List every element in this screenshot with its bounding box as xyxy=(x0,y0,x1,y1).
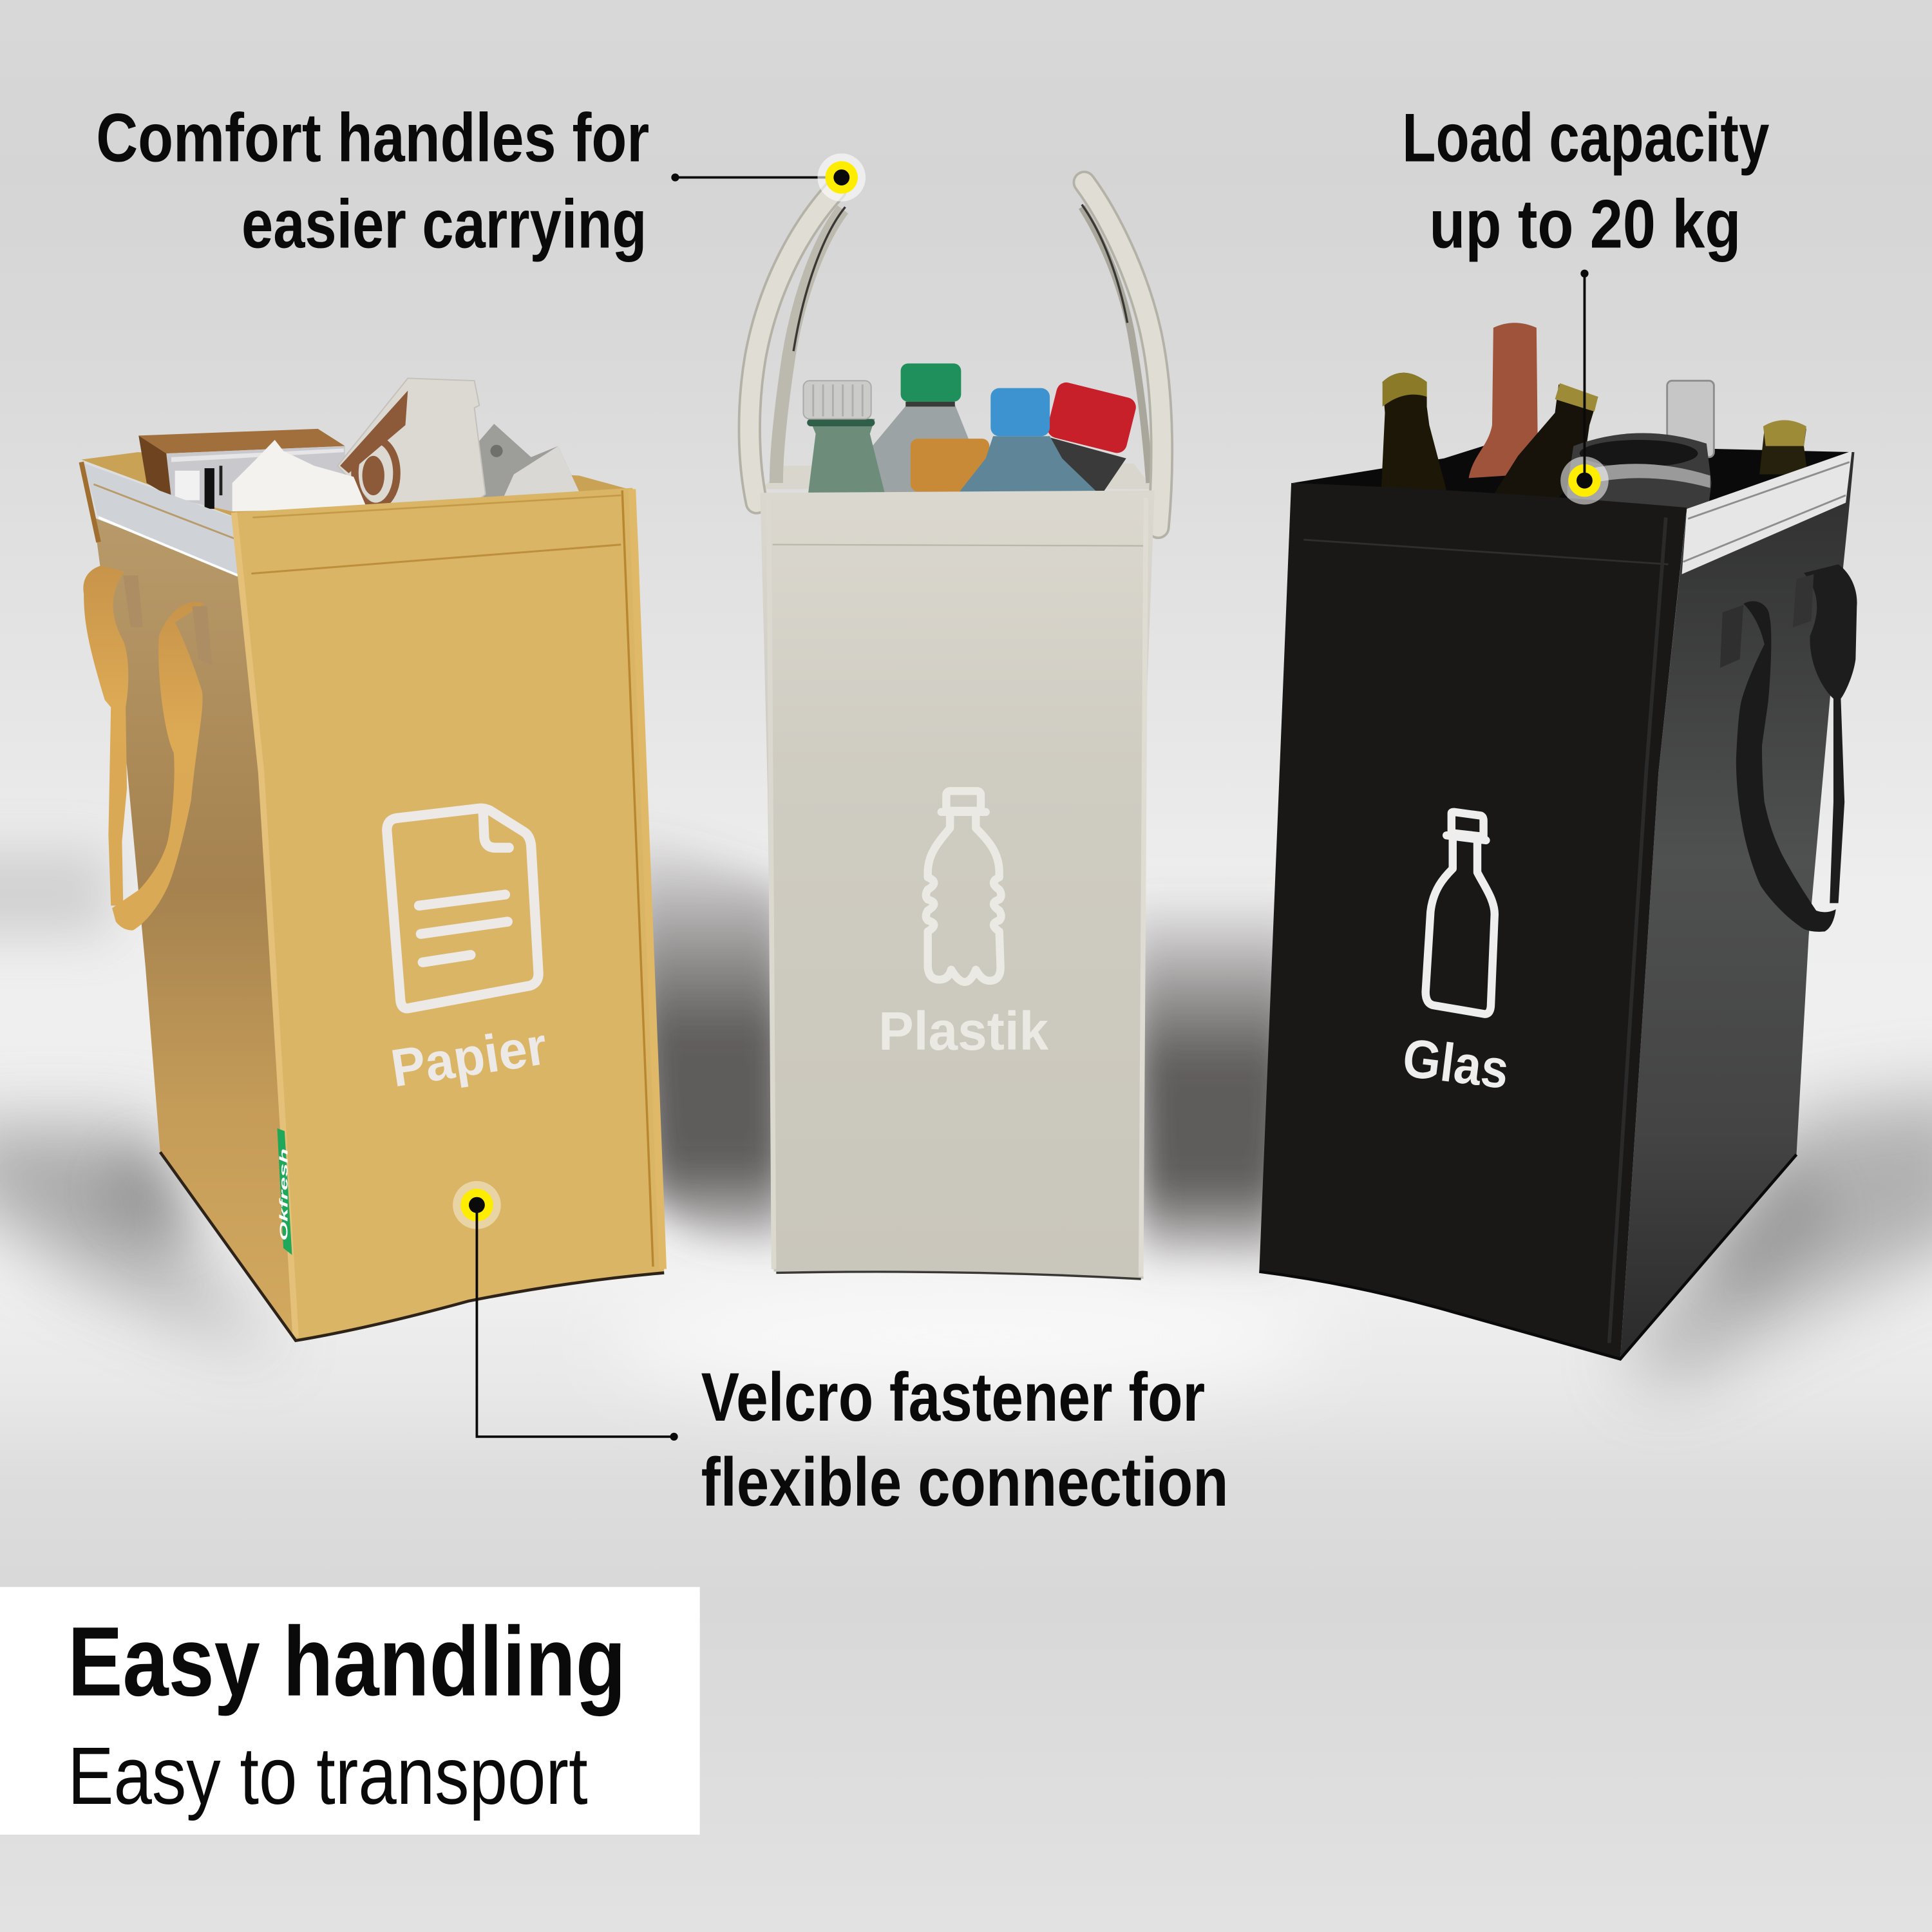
yellow paper bag xyxy=(81,378,664,1341)
blue bottle body xyxy=(959,436,1098,493)
white cap xyxy=(803,381,871,419)
plastic bottles xyxy=(803,363,1138,493)
subheading: Easy to transport xyxy=(68,1730,588,1821)
callout: load capacity xyxy=(1402,99,1769,504)
side front strap xyxy=(1720,601,1836,932)
jar xyxy=(1567,433,1712,513)
callout text: easier carrying xyxy=(242,185,647,263)
side panel xyxy=(93,518,296,1341)
paper contents: crumpled paper xyxy=(232,440,367,511)
blue cap xyxy=(990,388,1050,436)
label: Papier: Papier xyxy=(387,1017,551,1098)
callout text: Comfort handles for xyxy=(96,99,649,176)
green cap xyxy=(901,363,961,406)
leader line xyxy=(671,173,842,182)
icon: plastic bottle xyxy=(926,791,1001,982)
tilted dark bottle xyxy=(1488,384,1598,505)
marker dot xyxy=(453,1181,501,1229)
black glass bag xyxy=(1259,323,1857,1359)
plastic bag xyxy=(750,182,1162,1279)
front panel xyxy=(1259,483,1687,1359)
red bottle xyxy=(1469,323,1538,478)
heading: Easy handling xyxy=(68,1607,626,1717)
callout text: Load capacity xyxy=(1402,99,1769,176)
reflective band xyxy=(81,462,238,575)
clear bottle body xyxy=(873,402,969,493)
green glass bottle xyxy=(807,419,885,493)
red cap xyxy=(1045,381,1138,455)
left handle xyxy=(750,190,845,503)
brand label xyxy=(277,1128,292,1255)
glass bottles xyxy=(1381,323,1808,513)
callout text xyxy=(701,1358,1229,1520)
orange cap xyxy=(911,439,989,491)
dark bottle with red cap xyxy=(1050,437,1126,493)
callout text xyxy=(96,99,649,263)
panel: headline xyxy=(0,1587,700,1835)
callout text: Velcro fastener for xyxy=(701,1358,1205,1435)
right handle xyxy=(1082,182,1162,527)
bag interior xyxy=(1293,444,1854,511)
bag interior xyxy=(761,463,1153,489)
side rear strap xyxy=(1793,564,1857,903)
callout text xyxy=(1402,99,1769,263)
paper contents: cardboard box xyxy=(138,429,345,511)
paper contents: small egg tray xyxy=(478,424,579,499)
callout: velcro fastener xyxy=(453,1181,1229,1520)
marker dot xyxy=(1560,457,1609,504)
side front strap xyxy=(112,602,212,931)
clear bottle xyxy=(1667,381,1714,457)
callout text: up to 20 kg xyxy=(1429,185,1741,263)
side back strap xyxy=(83,565,143,905)
brand label: Okfresh xyxy=(278,1148,290,1241)
front panel xyxy=(760,490,1155,1279)
icon: glass bottle xyxy=(1426,812,1495,1014)
bag interior xyxy=(81,452,633,518)
leader line xyxy=(1580,270,1589,480)
white reflective band xyxy=(1682,451,1852,574)
bottom edge xyxy=(160,1152,664,1341)
side panel xyxy=(1620,452,1854,1359)
label: Glas: Glas xyxy=(1399,1027,1512,1100)
marker dot xyxy=(817,153,866,202)
small dark bottle xyxy=(1759,421,1808,475)
front panel xyxy=(234,488,664,1341)
label: Plastik: Plastik xyxy=(878,1001,1048,1061)
paper contents: egg carton xyxy=(337,378,486,509)
callout text: flexible connection xyxy=(701,1443,1229,1520)
icon: paper document xyxy=(387,808,538,1009)
callout: comfort handles xyxy=(96,99,866,263)
leader line xyxy=(477,1205,678,1441)
left olive bottle xyxy=(1381,373,1446,490)
